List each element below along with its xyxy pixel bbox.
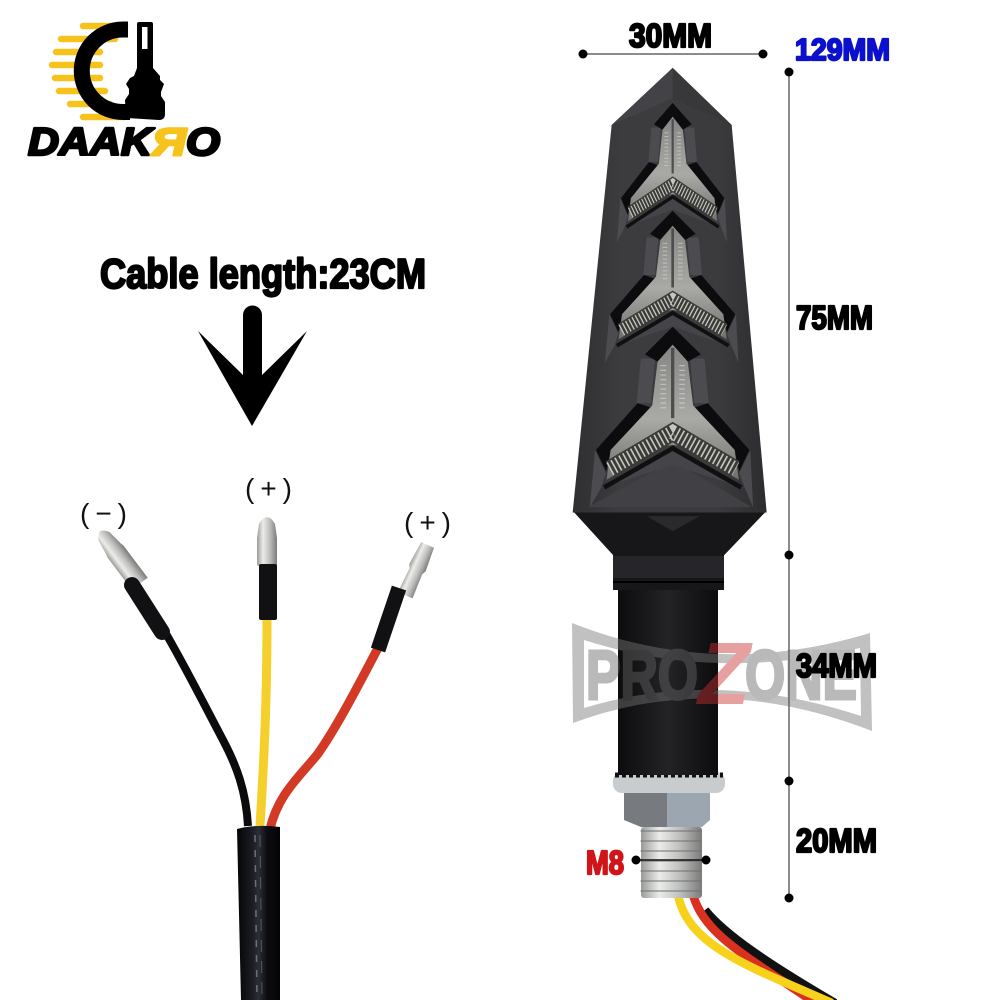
label: housing length: 75MM [796,299,873,336]
watermark: PROZONE [572,623,872,731]
wiring diagram [80,473,451,1000]
wordmark: DAAK [28,121,155,164]
lamp housing [573,68,767,555]
label: minus terminal: (−) [80,498,127,529]
connector: yellow wire [257,517,277,566]
arrow: down [198,306,307,426]
wire: yellow [260,620,267,826]
watermark: PROZONE: PRO [586,636,698,714]
connector: red wire [397,541,436,599]
mounting tube [618,590,718,775]
housing underside [573,511,767,555]
cable sheath [237,826,280,1000]
label: bolt length: 20MM [796,822,877,859]
label: total length: 129MM [795,32,890,67]
threaded bolt [641,827,702,898]
icon: C-shaped headlight bulb [82,22,165,120]
wire: black [165,632,248,826]
heading: cable length: Cable length:23CM [100,250,426,297]
heat shrink: yellow wire [259,564,277,620]
chevron lens: middle [605,211,738,362]
dimension: M8 thread: M8 [586,844,624,881]
label: tube length: 34MM [796,647,877,684]
collar [613,548,724,590]
label: plus terminal middle: (+) [245,473,292,504]
dimension: width 30MM: 30MM [629,17,712,54]
chevron lens: top [617,103,727,242]
connector: black wire [92,525,148,590]
dimension: width 30MM [578,17,768,58]
icon: yellow speed bars [52,26,125,117]
knurled flange [613,772,725,793]
rear wires [678,895,835,1000]
heat shrink: red wire [378,588,399,650]
dimension: vertical length scale [784,68,794,902]
base facet [588,461,752,507]
logo: DAAKRO [28,22,220,164]
heat shrink: black wire [132,585,162,632]
wire: red [270,648,378,829]
tip facets [612,68,732,125]
wordmark: O [186,121,220,164]
notch [647,516,700,531]
watermark: PROZONE: ONE [745,636,857,714]
housing face [573,68,767,512]
chevron lens: bottom [590,327,753,507]
watermark: PROZONE: Z [695,624,753,723]
dimension: M8 thread [586,844,710,881]
product: turn signal [573,68,835,1000]
wordmark: Я [151,121,188,164]
hex nut [624,792,710,827]
wordmark [28,121,220,164]
label: plus terminal right: (+) [404,507,451,538]
